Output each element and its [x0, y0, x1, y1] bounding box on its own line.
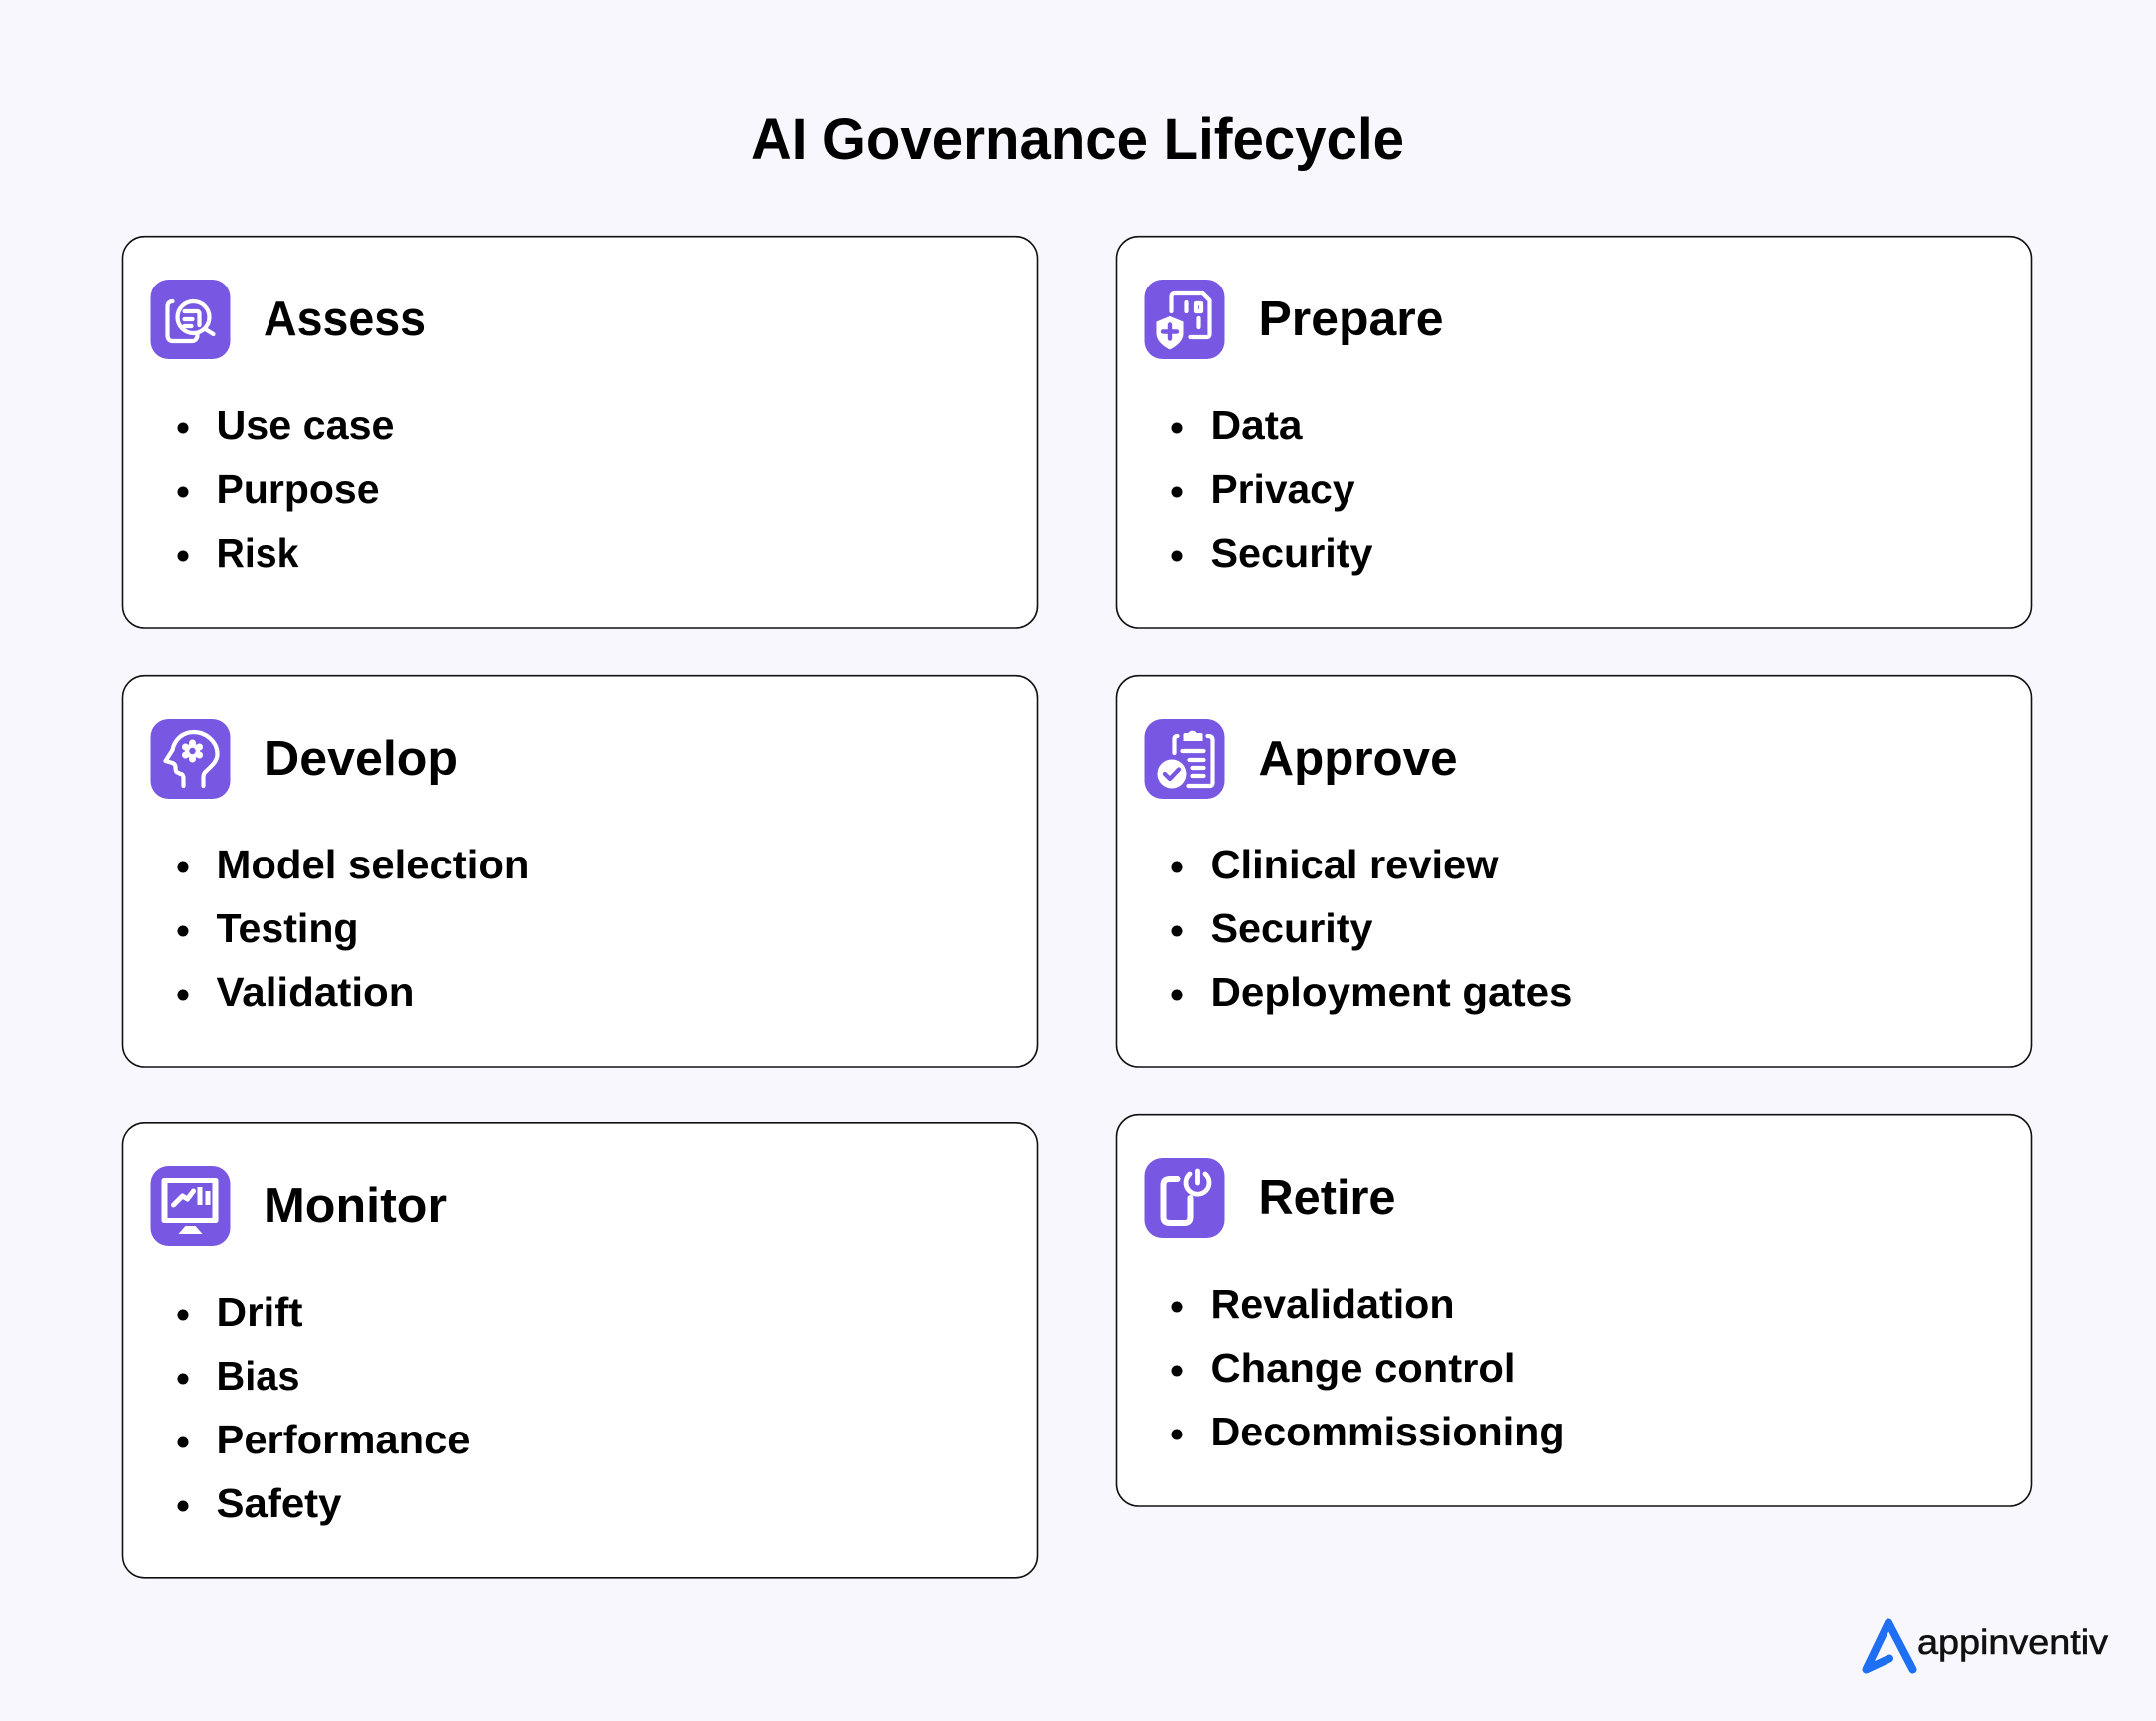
bullet list: Prepare: Privacy: [1210, 466, 1355, 512]
heading: Develop: Develop: [264, 732, 458, 786]
icon: head with gear: [150, 719, 230, 799]
bullet list: Retire: Change control: [1210, 1345, 1515, 1391]
logo: appinventiv: [1867, 1623, 2109, 1669]
heading: Assess: Assess: [264, 292, 426, 346]
panel: Monitor: [122, 1123, 1038, 1578]
bullet list: Develop: Validation: [216, 969, 415, 1015]
bullet list: Develop: [178, 842, 529, 1015]
bullet list: Prepare: [1172, 402, 1373, 576]
panel: Retire: [1116, 1115, 2032, 1506]
bullet list: Assess: Use case: [216, 402, 395, 448]
title: AI Governance Lifecycle: [751, 107, 1404, 172]
icon: data shield: [1144, 280, 1224, 359]
icon: monitor chart: [150, 1166, 230, 1246]
bullet list: Monitor: Bias: [216, 1353, 299, 1399]
bullet list: Monitor: Performance: [216, 1417, 471, 1462]
bullet list: Approve: Clinical review: [1210, 842, 1499, 887]
bullet list: Monitor: Safety: [216, 1480, 342, 1526]
bullet list: Prepare: Data: [1210, 402, 1304, 448]
bullet list: Approve: [1172, 842, 1573, 1015]
heading: Retire: Retire: [1258, 1171, 1395, 1225]
panel: Develop: [122, 676, 1038, 1067]
bullet list: Approve: Security: [1210, 905, 1373, 951]
icon: document search: [150, 280, 230, 359]
logo: appinventiv: appinventiv: [1917, 1623, 2109, 1662]
bullet list: Monitor: Drift: [216, 1289, 303, 1335]
panel: Approve: [1116, 676, 2032, 1067]
icon: clipboard check: [1144, 719, 1224, 799]
bullet list: Monitor: [178, 1289, 471, 1526]
bullet list: Develop: Testing: [216, 905, 359, 951]
heading: Monitor: Monitor: [264, 1179, 447, 1233]
icon: phone power: [1144, 1158, 1224, 1238]
bullet list: Retire: Decommissioning: [1210, 1409, 1565, 1454]
heading: Approve: Approve: [1258, 732, 1457, 786]
bullet list: Approve: Deployment gates: [1210, 969, 1573, 1015]
bullet list: Retire: Revalidation: [1210, 1281, 1455, 1327]
heading: Prepare: Prepare: [1258, 292, 1443, 346]
bullet list: Develop: Model selection: [216, 842, 529, 887]
bullet list: Assess: Risk: [216, 530, 299, 576]
panel: Assess: [122, 237, 1038, 628]
bullet list: Assess: [178, 402, 395, 576]
panel: Prepare: [1116, 237, 2032, 628]
bullet list: Prepare: Security: [1210, 530, 1373, 576]
bullet list: Retire: [1172, 1281, 1565, 1454]
bullet list: Assess: Purpose: [216, 466, 379, 512]
